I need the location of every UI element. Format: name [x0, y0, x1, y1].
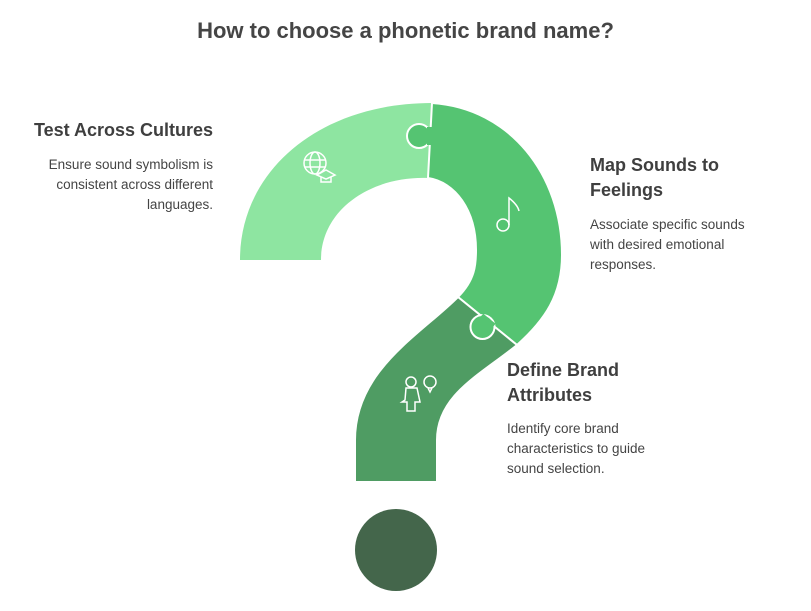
text block: define brand attributes: characteristics to guide	[507, 441, 645, 456]
text block: test across cultures: Ensure sound symbolism is	[49, 157, 213, 172]
segment: light (test across cultures)	[240, 103, 432, 260]
icon: person and lightbulb	[402, 376, 436, 411]
text block: map sounds: Map Sounds to	[590, 155, 719, 175]
puzzle knob bottom	[470, 314, 496, 339]
text block: test across cultures	[34, 120, 213, 212]
icon: music note	[497, 198, 519, 231]
text block: define brand attributes	[507, 360, 645, 476]
text block: test across cultures: consistent across different	[56, 177, 213, 192]
text block: define brand attributes: sound selection.	[507, 461, 605, 476]
dot	[355, 509, 437, 591]
segment: medium (map sounds)	[428, 103, 562, 345]
text block: map sounds: with desired emotional	[590, 237, 724, 252]
text block: map sounds: Associate specific sounds	[590, 217, 745, 232]
text block: test across cultures: languages.	[147, 197, 213, 212]
text block: map sounds: Feelings	[590, 180, 663, 200]
text block: map sounds: responses.	[590, 257, 656, 272]
text block: test across cultures: Test Across Cultures	[34, 120, 213, 140]
segment: dark (define attributes)	[355, 297, 517, 482]
text block: define brand attributes: Define Brand	[507, 360, 619, 380]
text block: define brand attributes: Identify core brand	[507, 421, 619, 436]
text block: define brand attributes: Attributes	[507, 385, 592, 405]
icon: globe with cap	[304, 152, 335, 182]
puzzle knob top	[407, 124, 434, 148]
text block: map sounds	[590, 155, 745, 272]
title: How to choose a phonetic brand name?	[197, 18, 614, 43]
